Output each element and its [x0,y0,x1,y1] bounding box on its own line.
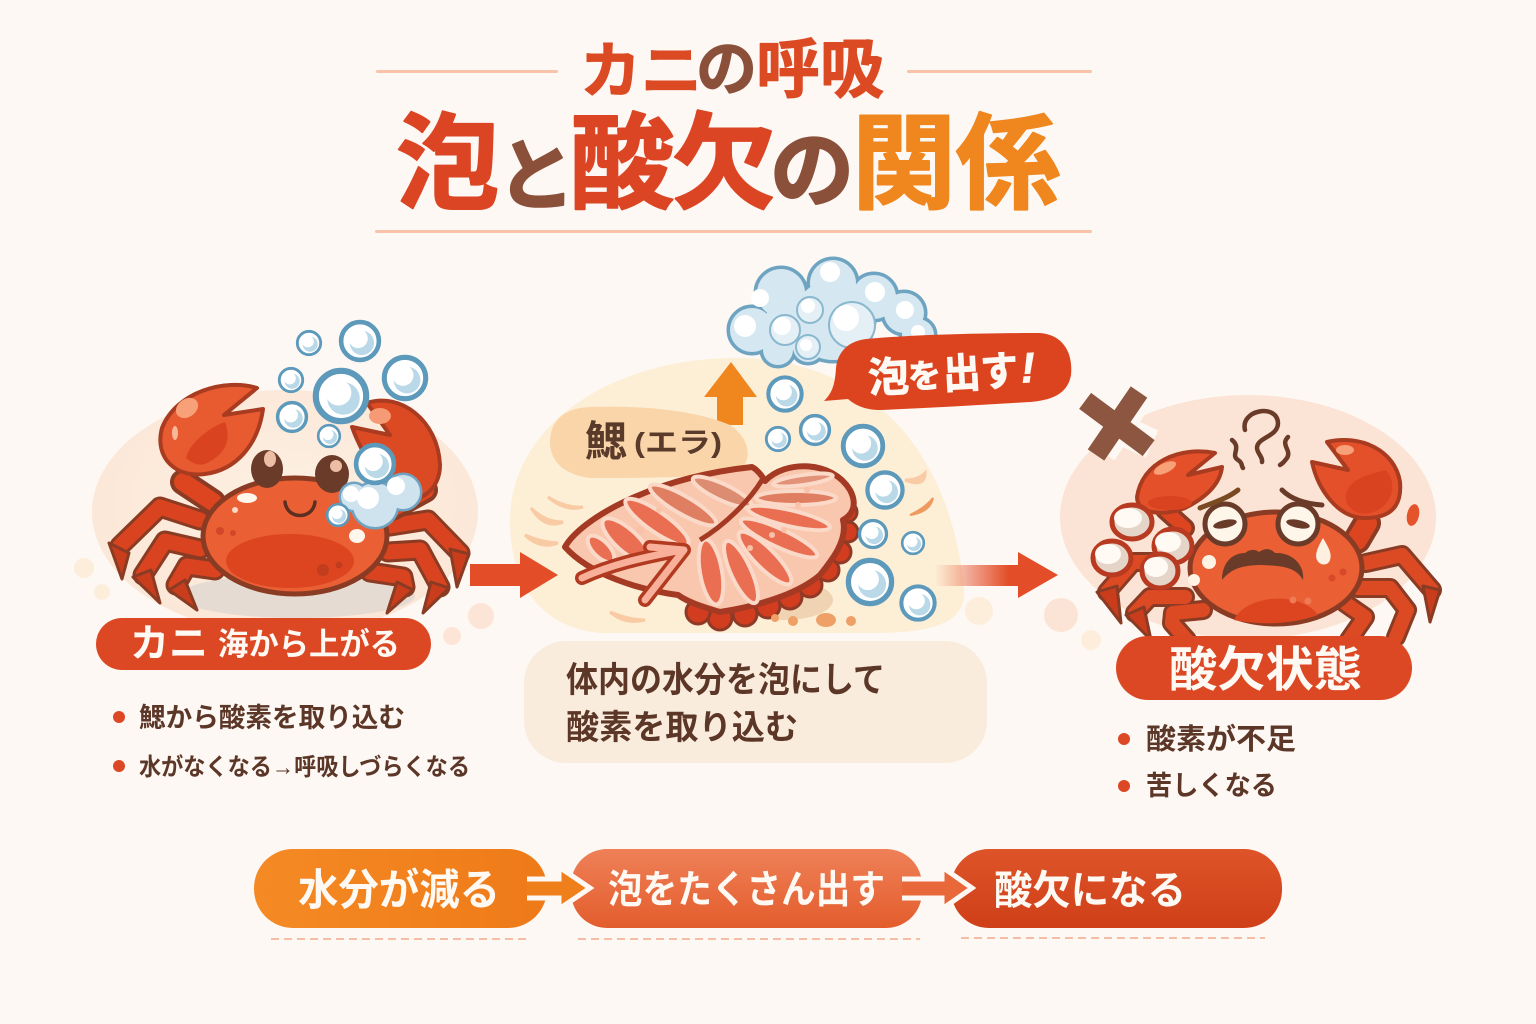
bullet list: symptoms: 苦しくなる [1146,771,1277,801]
bullet list: crab [113,703,470,781]
step: 泡をたくさん出す [571,849,922,928]
arrow: step 1 to step 2 [527,867,590,909]
arrow: step 2 to step 3 [902,867,972,909]
title line: 泡と酸欠の関係: 欠 [672,107,776,223]
bullet list: symptoms: 酸素が不足 [1146,722,1296,756]
bullet list: crab: 水がなくなる→呼吸しづらくなる [139,753,470,781]
text box: gill explanation: 酸素を取り込む [566,709,798,747]
ground shadow [179,574,415,618]
panel: crab leaving the sea [74,322,494,781]
callout: 泡を出す!: を [907,357,942,395]
callout: 泡を出す!: 出す [942,348,1019,398]
title [375,33,1092,233]
title line: 泡と酸欠の関係: 酸 [570,107,674,223]
title line: 泡と酸欠の関係 [396,107,1060,223]
step: 水分が減る: 水分が減る [298,867,500,915]
bullet list: symptoms [1118,722,1296,801]
title line: カニの呼吸: の [696,35,757,103]
icon: gill [565,466,858,630]
text box: gill explanation: 体内の水分を泡にして [566,661,885,700]
panel: gill and foam [510,260,1071,763]
step: 酸欠になる [951,849,1282,928]
icon: suffering crab [1093,440,1440,640]
title line: 泡と酸欠の関係: 関 [852,107,956,223]
foam cloud [730,260,934,365]
text box: gill explanation [524,641,987,763]
decorative blob behind crab [1060,395,1436,639]
title line: カニの呼吸: カ [580,37,641,105]
bullet list: crab: 鰓から酸素を取り込む [139,703,405,733]
title line: カニの呼吸: 呼吸 [756,33,884,106]
step: 水分が減る [254,849,547,928]
flow: summary chain [254,849,1282,939]
decorative blob behind gill [510,358,964,633]
panel: oxygen deficient crab [1044,392,1440,801]
arrow: up orange [704,362,757,425]
label: カニ 海から上がる [96,618,431,670]
label: 酸欠状態 [1116,636,1412,700]
label: 鰓(エラ) [550,407,748,478]
foam balls on claw [1093,505,1192,588]
label: カニ 海から上がる: 海から上がる [218,627,400,662]
title line: カニの呼吸 [580,33,884,106]
step: 泡をたくさん出す: 泡をたくさん出す [608,869,885,912]
title line: 泡と酸欠の関係: と [497,132,575,220]
arrow: gill to oxygen deficiency [935,552,1058,598]
callout: 泡を出す! [824,333,1071,410]
decorative blob behind crab [92,390,478,634]
title line: カニの呼吸: ニ [641,37,702,105]
label: 鰓(エラ): 鰓 [585,418,627,465]
callout: 泡を出す!: ! [1020,344,1036,392]
icon: cross mark [1078,392,1156,455]
icon: bubbles above crab [278,322,426,527]
label: 鰓(エラ): (エラ) [634,427,722,458]
orange dots [771,613,856,627]
title line: 泡と酸欠の関係: 泡 [396,107,500,223]
title line: 泡と酸欠の関係: 係 [956,107,1060,223]
label: カニ 海から上がる: カニ [130,623,208,666]
icon: rising bubbles [766,377,935,620]
callout: 泡を出す!: 泡 [867,353,910,402]
title line: 泡と酸欠の関係: の [770,124,854,218]
icon: confusion marks [1232,411,1288,468]
arrow: crab to gill [470,552,558,598]
step: 酸欠になる: 酸欠になる [994,869,1186,913]
icon: happy crab [109,385,469,613]
motion swishes [525,473,933,621]
label: 酸欠状態: 酸欠状態 [1169,644,1362,697]
